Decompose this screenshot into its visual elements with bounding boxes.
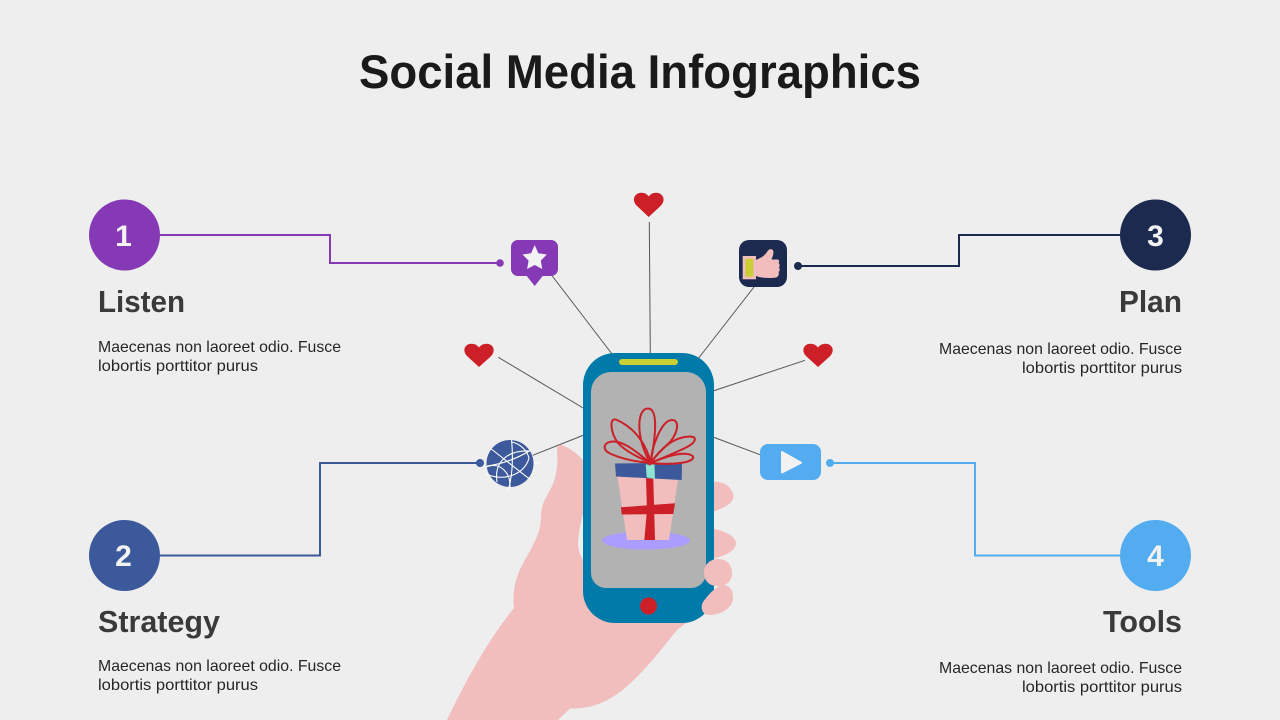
text block: Tools: Maecenas non laoreet odio. Fusce <box>939 660 1182 677</box>
text block: Plan: Maecenas non laoreet odio. Fusce <box>939 341 1182 358</box>
number badge 4 <box>1120 520 1191 591</box>
number badge 1: 1 <box>115 220 132 253</box>
text block: Listen <box>98 339 341 375</box>
heading: Strategy: Strategy <box>98 604 221 639</box>
gift illustration <box>602 408 695 550</box>
number badge 3 <box>1120 200 1191 270</box>
text block: Plan: lobortis porttitor purus <box>1022 360 1182 377</box>
icon: video play button <box>760 444 821 480</box>
number badge 1 <box>89 200 160 270</box>
heading: Plan: Plan <box>1119 284 1182 319</box>
little finger over phone edge <box>702 585 733 615</box>
connector: Plan <box>794 235 1130 270</box>
finger over phone edge <box>704 559 732 586</box>
heading: Tools: Tools <box>1103 604 1182 639</box>
phone <box>583 353 714 623</box>
connector: Tools <box>826 459 1130 556</box>
text block: Strategy <box>98 658 341 694</box>
number badge 2: 2 <box>115 540 132 573</box>
number badge 4: 4 <box>1147 540 1164 573</box>
panel: 2 Strategy <box>89 459 484 694</box>
icon: globe <box>486 439 540 491</box>
text block: Listen: lobortis porttitor purus <box>98 358 258 375</box>
icon: thumbs up <box>739 240 787 287</box>
hand palm and thumb <box>447 445 690 720</box>
gift bow <box>605 408 695 464</box>
connector: Strategy <box>150 459 484 556</box>
text block: Plan <box>939 341 1182 377</box>
text block: Strategy: Maecenas non laoreet odio. Fusce <box>98 658 341 675</box>
icon: heart right <box>803 344 833 367</box>
icon: heart left <box>464 344 494 367</box>
phone home button <box>640 598 657 614</box>
icon: heart top <box>634 193 664 217</box>
text block: Tools <box>939 660 1182 696</box>
fingers <box>710 482 736 559</box>
phone screen <box>591 372 706 588</box>
number badge 3: 3 <box>1147 220 1164 253</box>
title: Social Media Infographics <box>359 45 921 98</box>
panel: 3 Plan <box>794 200 1191 377</box>
number badge 2 <box>89 520 160 591</box>
panel: 1 Listen <box>89 200 504 375</box>
text block: Listen: Maecenas non laoreet odio. Fusce <box>98 339 341 356</box>
heading: Listen: Listen <box>98 284 185 319</box>
text block: Tools: lobortis porttitor purus <box>1022 679 1182 696</box>
icon: star speech bubble <box>511 240 558 286</box>
panel: 4 Tools <box>826 459 1191 696</box>
text block: Strategy: lobortis porttitor purus <box>98 677 258 694</box>
connector: Listen <box>150 235 504 267</box>
radiating spoke lines <box>498 222 805 455</box>
phone speaker <box>619 359 678 365</box>
